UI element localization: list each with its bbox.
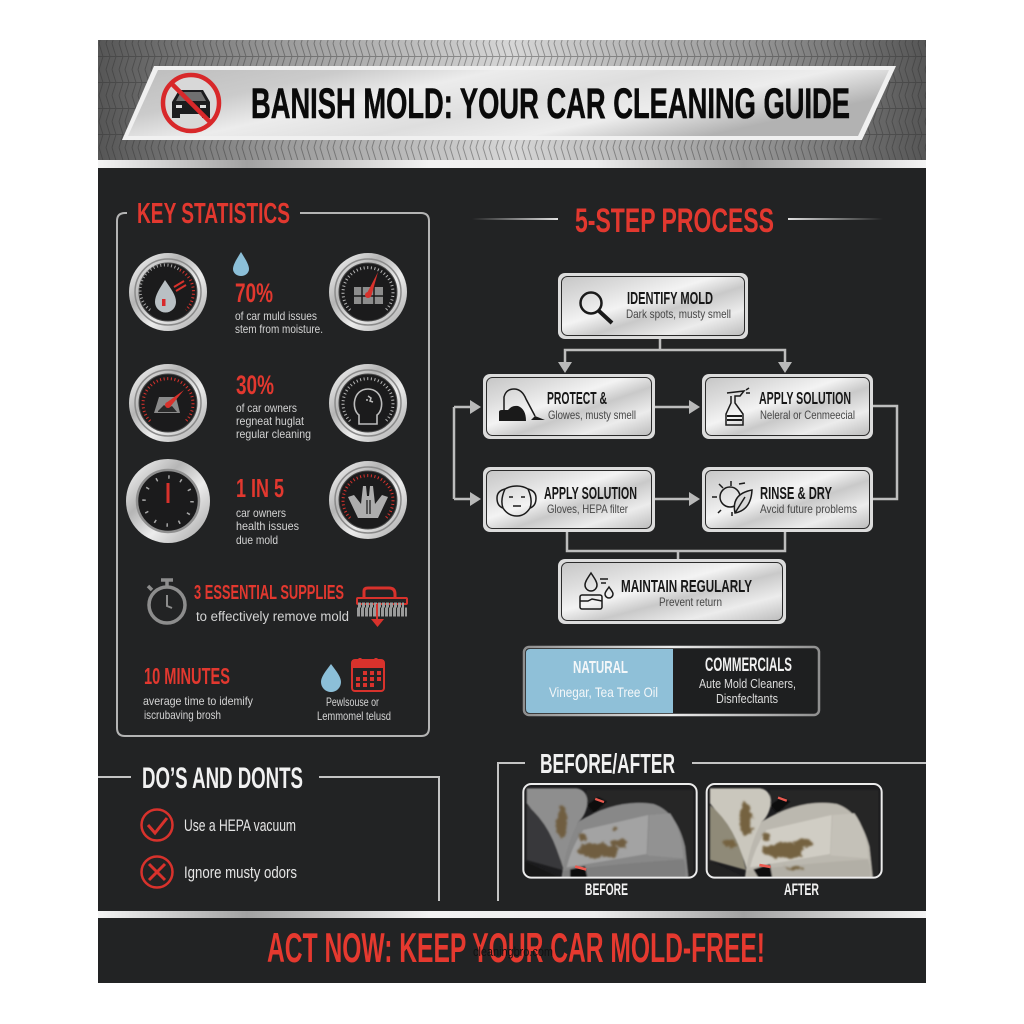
icon: scrub brush xyxy=(357,588,407,627)
step: identify mold: Dark spots, musty smell xyxy=(626,307,731,321)
stat: 10 minutes xyxy=(143,663,253,722)
caption: calendar note: Lemmomel telusd xyxy=(317,709,391,723)
step: apply solution top: Neleral or Cenmeecial xyxy=(760,408,855,422)
stat: 3 essential supplies xyxy=(194,582,349,624)
icon: magnifier xyxy=(580,292,612,323)
label: after: AFTER xyxy=(784,880,819,899)
stat: 10 minutes: 10 MINUTES xyxy=(144,663,230,689)
icon: stopwatch xyxy=(148,580,185,623)
commercial column: Aute Mold Cleaners, xyxy=(699,676,796,691)
heading: before/after: BEFORE/AFTER xyxy=(540,748,675,779)
stat: 3 essential supplies: to effectively remove mold xyxy=(196,609,349,624)
icon: check xyxy=(142,810,172,840)
stat: 30%: 30% xyxy=(236,370,274,400)
panel: do's and don'ts xyxy=(98,762,439,901)
gauge: head outline xyxy=(329,364,407,442)
header band xyxy=(98,40,926,168)
photo: before seat xyxy=(523,784,697,878)
icon: spray bottle xyxy=(726,388,750,425)
caption: calendar note xyxy=(317,695,391,723)
icon: water drop xyxy=(233,252,249,276)
label: before: BEFORE xyxy=(585,880,628,899)
gauge: mold on seat xyxy=(129,364,207,442)
gauge: gloves xyxy=(329,461,407,539)
icon: drops and tray xyxy=(580,573,613,609)
dont item: Ignore musty odors xyxy=(184,864,297,882)
step: maintain regularly xyxy=(558,559,786,624)
icon: face mask xyxy=(497,486,536,516)
icon: no car sign xyxy=(163,75,219,131)
footer banner xyxy=(98,911,926,983)
step: apply solution top xyxy=(702,374,873,439)
panel: natural vs commercial xyxy=(524,647,819,715)
stat: 70%: stem from moisture. xyxy=(235,322,323,336)
stat: 30%: of car owners xyxy=(236,401,297,415)
gauge: moisture drop xyxy=(129,253,207,331)
icon: sun and leaf xyxy=(712,481,752,516)
panel: key statistics xyxy=(117,198,429,736)
natural column xyxy=(549,657,658,700)
heading: do's and donts: DO’S AND DONTS xyxy=(142,762,303,795)
heading: 5-step process: 5-STEP PROCESS xyxy=(575,202,774,240)
step: rinse and dry: Avcid future problems xyxy=(760,502,857,516)
stat: 70%: of car muld issues xyxy=(235,309,317,323)
stat: 10 minutes: average time to idemify xyxy=(143,694,253,708)
step: identify mold: IDENTIFY MOLD xyxy=(627,288,713,308)
natural column: NATURAL xyxy=(573,657,628,677)
stat: 70% xyxy=(233,252,323,336)
commercial column: COMMERCIALS xyxy=(705,655,792,676)
stat: 1 in 5: health issues xyxy=(236,519,299,533)
commercial column: Disnfecltants xyxy=(716,691,778,706)
step: identify mold xyxy=(558,273,748,339)
icon: drop xyxy=(321,664,341,692)
step: protect: Glowes, musty smell xyxy=(548,408,636,422)
main dark panel xyxy=(98,168,926,911)
icon: vacuum xyxy=(499,389,545,421)
step: rinse and dry: RINSE & DRY xyxy=(760,483,832,503)
do item: Use a HEPA vacuum xyxy=(184,817,296,835)
icon: cross xyxy=(142,856,172,888)
step: rinse and dry xyxy=(702,467,873,532)
caption: calendar note: Pewlsouse or xyxy=(326,695,379,709)
step: protect xyxy=(483,374,655,439)
stat: 1 in 5 xyxy=(236,473,299,547)
stat: 3 essential supplies: 3 ESSENTIAL SUPPLIES xyxy=(194,582,344,604)
natural column: Vinegar, Tea Tree Oil xyxy=(549,684,658,700)
icon: calendar xyxy=(352,658,384,691)
step: apply solution bottom: APPLY SOLUTION xyxy=(544,483,637,503)
stat: 1 in 5: 1 IN 5 xyxy=(236,473,284,503)
watermark: cleaningbro.com xyxy=(473,945,553,959)
step: maintain regularly: Prevent return xyxy=(659,595,722,609)
stat: 70%: 70% xyxy=(235,278,273,308)
panel: before and after xyxy=(498,748,926,901)
gauge: clock xyxy=(126,459,210,543)
step: apply solution top: APPLY SOLUTION xyxy=(759,388,851,408)
stat: 30%: regneat huglat xyxy=(236,414,305,428)
stat: 30% xyxy=(236,370,311,441)
stat: 1 in 5: car owners xyxy=(236,506,286,520)
step: apply solution bottom: Gloves, HEPA filter xyxy=(547,502,628,516)
commercial column xyxy=(699,655,796,706)
title plate xyxy=(122,66,896,140)
stat: 1 in 5: due mold xyxy=(236,533,278,547)
stat: 30%: regular cleaning xyxy=(236,427,311,441)
connectors xyxy=(454,339,897,559)
gauge: dashboard xyxy=(329,253,407,331)
step: apply solution bottom xyxy=(483,467,655,532)
heading: key statistics: KEY STATISTICS xyxy=(137,198,290,230)
step: maintain regularly: MAINTAIN REGULARLY xyxy=(621,576,752,596)
step: protect: PROTECT & xyxy=(547,388,607,408)
stat: 10 minutes: iscrubaving brosh xyxy=(144,708,221,722)
photo: after seat xyxy=(707,784,882,878)
